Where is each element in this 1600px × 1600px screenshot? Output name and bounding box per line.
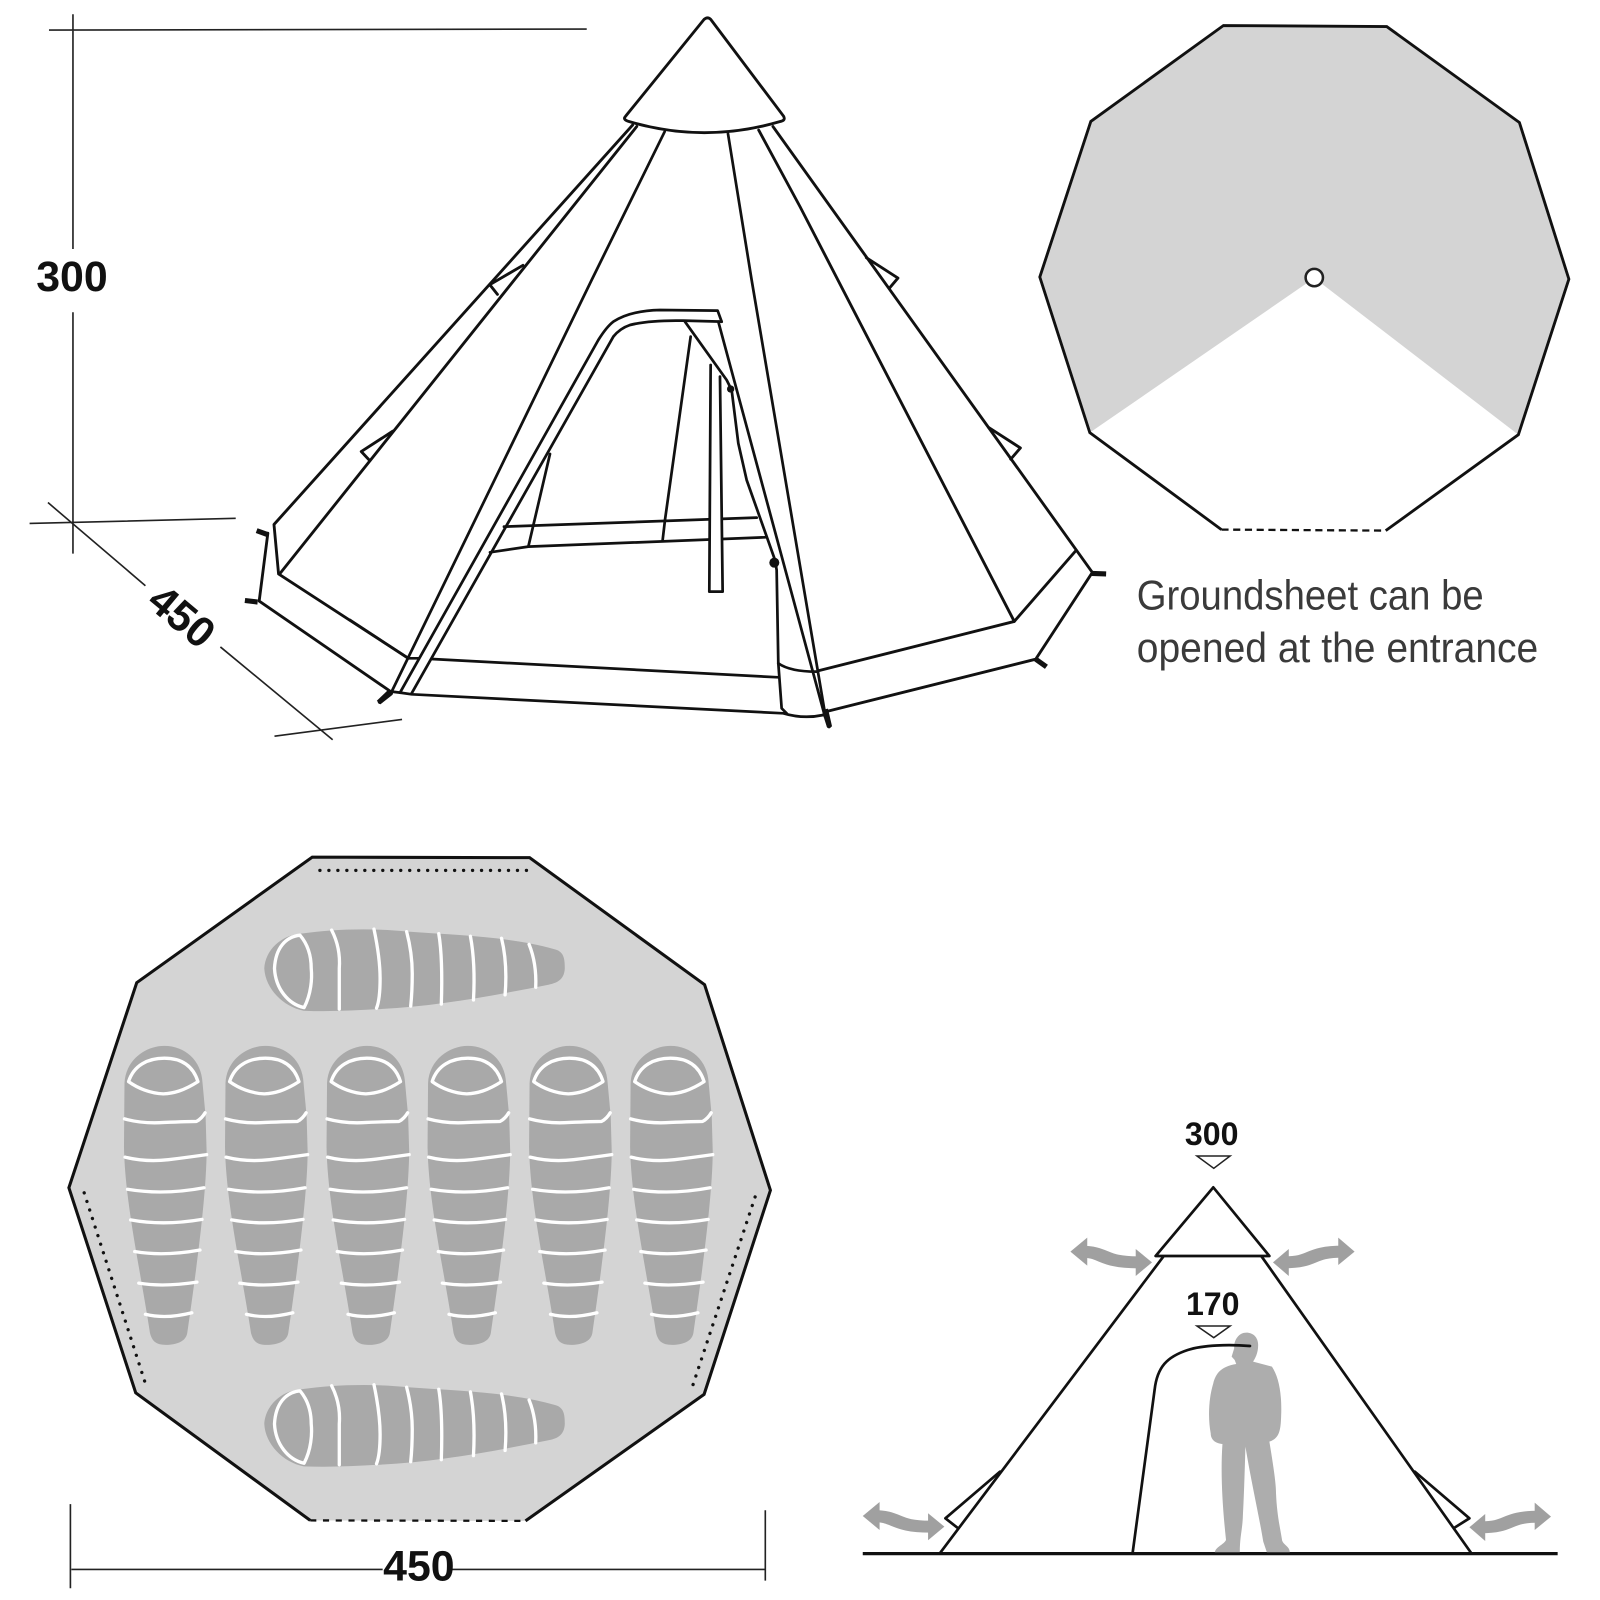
sleeping bag 3 — [327, 1046, 409, 1345]
dimension: width 450 — [48, 503, 402, 740]
arrow: top right vent — [1273, 1238, 1355, 1276]
centre pole circle — [1306, 269, 1323, 286]
arrow: bottom left vent — [863, 1502, 944, 1540]
groundsheet outline — [1040, 26, 1569, 531]
dotted mesh vents — [84, 870, 755, 1387]
dimension: height 300 — [30, 14, 587, 554]
panel: groundsheet plan — [1040, 26, 1569, 671]
arrow: top left vent — [1070, 1238, 1152, 1276]
tent left side wall — [245, 125, 637, 703]
door arch — [1133, 1345, 1250, 1553]
sleeping bag 2 — [225, 1046, 308, 1345]
height label 300 — [1185, 1116, 1239, 1168]
dimension: width 450: 450 — [139, 575, 224, 658]
dimension: 450 — [70, 1504, 765, 1591]
tent right side wall — [759, 127, 1106, 727]
groundsheet caption — [1137, 572, 1538, 671]
height label 170: 170 — [1186, 1286, 1240, 1322]
tent section outline — [940, 1187, 1471, 1553]
dashed entrance edge — [1221, 530, 1386, 531]
groundsheet caption: Groundsheet can be — [1137, 572, 1484, 619]
sleeping bag top — [264, 929, 565, 1011]
sleeping bag 5 — [529, 1046, 612, 1345]
sleeping bag 6 — [630, 1046, 713, 1345]
sleeping bag 1 — [124, 1046, 207, 1345]
sleeping bag bottom — [264, 1385, 565, 1467]
dimension: height 300: 300 — [36, 253, 108, 301]
dimension: 450: 450 — [383, 1543, 455, 1591]
floor plan outline — [69, 857, 770, 1521]
groundsheet caption: opened at the entrance — [1137, 624, 1538, 671]
tent cone top — [624, 18, 784, 133]
floor plan polygon — [69, 857, 770, 1521]
ground line — [863, 1552, 1558, 1555]
arrow: bottom right vent — [1469, 1503, 1551, 1541]
panel: tent perspective drawing with dimensions — [30, 14, 1106, 740]
sleeping bag 4 — [428, 1046, 510, 1345]
height label 300: 300 — [1185, 1116, 1239, 1152]
height label 170 — [1186, 1286, 1240, 1338]
tent door and interior — [350, 132, 829, 726]
groundsheet fill with open entrance wedge — [1040, 26, 1569, 435]
panel: sleeping layout plan — [69, 857, 770, 1591]
panel: side section with ventilation and heights — [863, 1116, 1558, 1554]
dashed entrance edge — [310, 1518, 526, 1523]
person silhouette — [1209, 1333, 1290, 1552]
